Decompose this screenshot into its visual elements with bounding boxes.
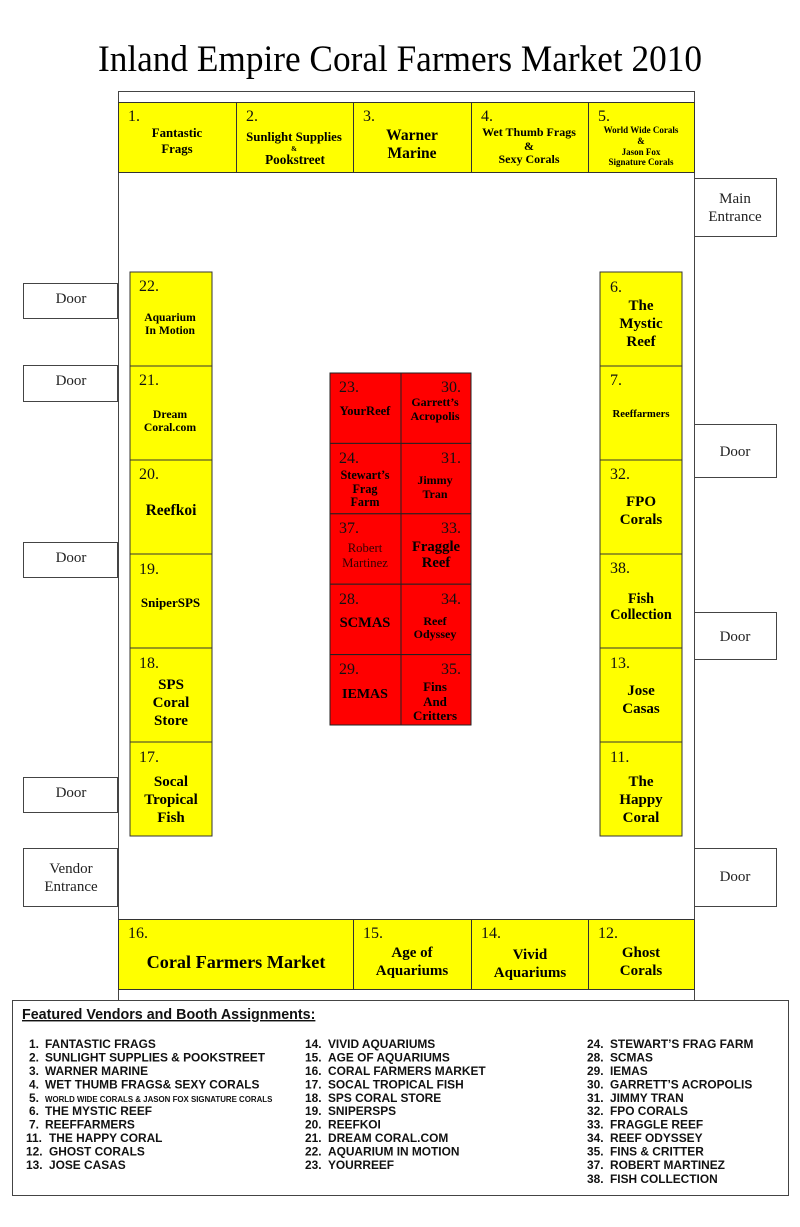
booth 33: 33. [441,520,461,537]
door: right 2 [694,612,776,660]
booth 15: Age of [391,945,434,961]
door: right 3 [694,848,776,906]
booth 14: Vivid [513,947,548,963]
booth 13: Jose [627,683,655,699]
booth 24: Frag [352,482,378,496]
booth 15: 15. [363,925,383,942]
booth 29: 29. [339,661,359,678]
vendor list column 3: 35. [587,1144,604,1158]
vendor list column 2: SPS CORAL STORE [328,1091,441,1105]
booth 37: Robert [348,541,383,555]
vendor list column 1: WET THUMB FRAGS& SEXY CORALS [45,1078,260,1092]
vendor list column 3: STEWART’S FRAG FARM [610,1037,753,1051]
booth 4: & [524,139,534,153]
door: left 2 [24,366,118,402]
top booth row [118,102,694,172]
booth 22: In Motion [145,324,196,337]
booth 33 [401,514,471,584]
door: left 3: Door [56,550,86,566]
booth 24: Farm [350,495,380,509]
vendor list column 2: 14. [305,1037,322,1051]
booth 33: Fraggle [412,539,461,555]
vendor list column 2: 19. [305,1104,322,1118]
booth 18: 18. [139,655,159,672]
booth 22 [130,272,212,366]
booth 23: 23. [339,379,359,396]
booth 5: & [637,136,645,146]
door: left 3 [24,542,118,578]
booth 2: Pookstreet [265,152,326,167]
vendor list column 1: WORLD WIDE CORALS & JASON FOX SIGNATURE CORALS [45,1095,272,1104]
booth 13 [600,648,682,742]
vendor list column 2: DREAM CORAL.COM [328,1131,448,1145]
booth 35: Fins [423,679,447,694]
booth 23: YourReef [340,404,391,418]
vendor list column 1: THE MYSTIC REEF [45,1104,152,1118]
vendor list column 1: 7. [29,1118,39,1132]
title: Inland Empire Coral Farmers Market 2010 [98,39,702,80]
booth 20 [130,460,212,554]
booth 16 [118,920,354,990]
booth 30: Acropolis [410,409,460,423]
vendor list column 2: YOURREEF [328,1158,394,1172]
booth 20: 20. [139,466,159,483]
vendor list column 1: THE HAPPY CORAL [49,1131,162,1145]
booth 4: 4. [481,108,493,125]
vendor list column 3: 32. [587,1104,604,1118]
vendor list column 2 [305,1037,486,1172]
vendor list column 1: WARNER MARINE [45,1064,148,1078]
booth 5 [588,102,694,172]
vendor list column 3: 28. [587,1050,604,1064]
booth 31: Jimmy [417,473,453,487]
door: right 3: Door [720,869,750,885]
booth 24 [330,443,401,514]
vendor list column 3: IEMAS [610,1064,648,1078]
booth 6 [600,272,682,366]
booth 1: Frags [161,142,193,156]
booth 5: Signature Corals [608,157,674,167]
booth 30 [401,373,471,443]
booth 35 [401,655,471,725]
booth 13: 13. [610,655,630,672]
vendor list column 3: 31. [587,1091,604,1105]
booth 18: Coral [153,695,189,711]
booth 30: 30. [441,379,461,396]
door: right 1 [694,424,776,478]
vendor list column 1: 1. [29,1037,39,1051]
vendor list column 2: 16. [305,1064,322,1078]
booth 28 [330,584,401,655]
booth 21 [130,366,212,460]
booth 21: 21. [139,372,159,389]
vendor list column 1 [26,1037,272,1172]
booth 17: 17. [139,749,159,766]
door: left 1: Door [56,291,86,307]
right booth column [600,272,682,836]
booth 6: Mystic [619,316,663,332]
vendor list column 1: GHOST CORALS [49,1144,145,1158]
booth 3: Warner [386,127,438,144]
panel: featured vendors [12,1000,788,1196]
centre red booth block [330,373,471,725]
booth 7 [600,366,682,460]
booth 4: Sexy Corals [498,152,560,166]
booth 35: Critters [413,708,457,723]
booth 30: Garrett’s [411,395,459,409]
booth 37: Martinez [342,556,388,570]
booth 15 [354,920,472,990]
door: right 2: Door [720,629,750,645]
booth 23 [330,373,401,443]
vendor list column 3: 34. [587,1131,604,1145]
door: left 4: Door [56,785,86,801]
booth 1 [118,102,236,172]
vendor list column 2: 23. [305,1158,322,1172]
vendor list column 1: REEFFARMERS [45,1118,135,1132]
vendor entrance: Vendor [49,861,93,877]
booth 14 [472,920,588,990]
booth 18 [130,648,212,742]
vendor list column 2: 20. [305,1118,322,1132]
booth 31 [401,443,471,514]
booth 38: 38. [610,560,630,577]
vendor list column 2: 15. [305,1050,322,1064]
booth 1: Fantastic [152,126,203,140]
booth 11: Coral [623,810,659,826]
booth 38 [600,554,682,648]
booth 32: FPO [626,494,656,510]
booth 31: Tran [422,487,448,501]
booth 12 [588,920,694,990]
booth 1: 1. [128,108,140,125]
booth 4: Wet Thumb Frags [482,125,576,139]
vendor list column 3: REEF ODYSSEY [610,1131,703,1145]
booth 6: 6. [610,279,622,296]
booth 7: 7. [610,372,622,389]
booth 38: Fish [628,591,654,607]
booth 17: Tropical [144,792,198,808]
booth 34: 34. [441,591,461,608]
vendor list column 1: 11. [26,1131,42,1145]
vendor list column 2: AQUARIUM IN MOTION [328,1144,459,1158]
main entrance [694,178,776,236]
booth 3: 3. [363,108,375,125]
booth 3: Marine [387,145,437,162]
booth 28: SCMAS [340,615,390,631]
booth 2: 2. [246,108,258,125]
vendor list column 3: FPO CORALS [610,1104,688,1118]
door: left 2: Door [56,373,86,389]
booth 21: Coral.com [144,421,196,434]
vendor list column 1: 6. [29,1104,39,1118]
vendor list column 3: 37. [587,1158,604,1172]
booth 20: Reefkoi [146,502,197,519]
booth 11: The [628,774,654,790]
door: left 4 [24,778,118,812]
vendor list column 2: 18. [305,1091,322,1105]
left booth column [130,272,212,836]
vendor list column 3: FINS & CRITTER [610,1144,704,1158]
vendor list column 1: 13. [26,1158,43,1172]
vendor list column 3: SCMAS [610,1050,653,1064]
booth 32: Corals [620,512,662,528]
booth 11: Happy [619,792,663,808]
booth 22: 22. [139,278,159,295]
booth 18: SPS [158,677,184,693]
vendor list column 2: 21. [305,1131,322,1145]
vendors heading: Featured Vendors and Booth Assignments: [22,1007,315,1023]
vendor list column 1: 2. [29,1050,39,1064]
vendor list column 3: JIMMY TRAN [610,1091,684,1105]
vendor list column 3: 24. [587,1037,604,1051]
booth 2: Sunlight Supplies [246,130,342,144]
booth 28: 28. [339,591,359,608]
vendor list column 3: 30. [587,1078,604,1092]
booth 5: World Wide Corals [604,125,679,135]
booth 21: Dream [153,408,187,421]
vendor list column 2: 17. [305,1078,322,1092]
booth 17: Socal [154,774,188,790]
booth 29: IEMAS [342,687,388,702]
vendor entrance: Entrance [44,879,98,895]
booth 2 [236,102,354,172]
booth 13: Casas [622,701,660,717]
booth 4 [472,102,588,172]
booth 38: Collection [610,607,672,623]
vendor list column 3: 29. [587,1064,604,1078]
floor plan hall outline [118,92,694,1000]
vendor list column 3: FRAGGLE REEF [610,1118,703,1132]
booth 12: Corals [620,963,662,979]
booth 32: 32. [610,466,630,483]
booth 35: And [423,694,448,709]
vendor list column 1: JOSE CASAS [49,1158,126,1172]
booth 37 [330,514,401,584]
booth 17 [130,742,212,836]
booth 16: 16. [128,925,148,942]
booth 24: Stewart’s [341,468,390,482]
vendor list column 3 [587,1037,753,1186]
booth 34: Reef [423,614,448,628]
door: left 1 [24,284,118,318]
main entrance: Main [719,191,751,207]
vendor list column 2: REEFKOI [328,1118,381,1132]
booth 12: Ghost [622,945,660,961]
booth 19 [130,554,212,648]
vendor list column 3: ROBERT MARTINEZ [610,1158,725,1172]
booth 11: 11. [610,749,629,766]
main entrance: Entrance [708,209,762,225]
vendor list column 2: 22. [305,1144,322,1158]
booth 34 [401,584,471,655]
vendor list column 3: 38. [587,1172,604,1186]
vendor list column 2: SOCAL TROPICAL FISH [328,1078,464,1092]
booth 3 [354,102,472,172]
vendor list column 3: 33. [587,1118,604,1132]
booth 6: The [628,298,654,314]
bottom booth row [118,920,694,990]
booth 14: 14. [481,925,501,942]
booth 11 [600,742,682,836]
booth 22: Aquarium [144,311,196,324]
booth 6: Reef [626,334,657,350]
booth 24: 24. [339,450,359,467]
booth 29 [330,655,401,725]
vendor list column 3: GARRETT’S ACROPOLIS [610,1078,752,1092]
booth 5: 5. [598,108,610,125]
booth 32 [600,460,682,554]
booth 19: 19. [139,561,159,578]
booth 14: Aquariums [494,965,566,981]
vendor list column 1: 12. [26,1144,43,1158]
booth 7: Reeffarmers [613,408,669,420]
vendor list column 2: AGE OF AQUARIUMS [328,1050,450,1064]
booth 12: 12. [598,925,618,942]
vendor list column 2: VIVID AQUARIUMS [328,1037,435,1051]
booth 16: Coral Farmers Market [147,952,325,972]
vendor entrance [24,848,118,906]
vendor list column 2: CORAL FARMERS MARKET [328,1064,486,1078]
booth 15: Aquariums [376,963,448,979]
vendor list column 1: 4. [29,1078,39,1092]
booth 31: 31. [441,450,461,467]
vendor list column 3: FISH COLLECTION [610,1172,718,1186]
vendor list column 1: 3. [29,1064,39,1078]
vendor list column 2: SNIPERSPS [328,1104,396,1118]
booth 33: Reef [422,555,451,571]
booth 37: 37. [339,520,359,537]
booth 2: & [291,145,297,153]
booth 18: Store [154,713,188,729]
booth 35: 35. [441,661,461,678]
vendor list column 1: SUNLIGHT SUPPLIES & POOKSTREET [45,1050,266,1064]
booth 19: SniperSPS [141,595,200,610]
door: right 1: Door [720,444,750,460]
booth 17: Fish [157,810,185,826]
vendor list column 1: 5. [29,1091,39,1105]
vendor list column 1: FANTASTIC FRAGS [45,1037,156,1051]
booth 34: Odyssey [414,627,456,641]
booth 5: Jason Fox [622,147,661,157]
